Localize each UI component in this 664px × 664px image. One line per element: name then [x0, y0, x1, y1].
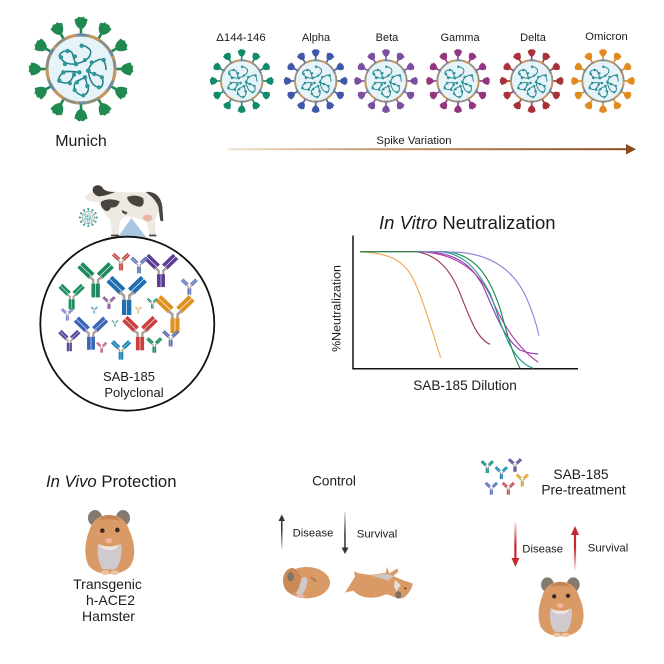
icon: lying hamster — [345, 567, 413, 599]
variant: Beta — [354, 32, 418, 113]
icon: Munich virus — [28, 16, 134, 122]
chart: neutralization curves — [330, 236, 578, 393]
variant: Gamma: Gamma — [440, 32, 480, 44]
variant: Gamma — [426, 32, 490, 113]
variant: Delta: Delta — [520, 32, 547, 44]
antibodies — [58, 253, 198, 360]
variant: delta 144-146 — [210, 32, 274, 113]
label: Disease red section: Disease — [522, 544, 563, 556]
label: Transgenic h-ACE2 Hamster: Hamster — [82, 608, 135, 624]
heading: In Vitro Neutralization: In Vitro Neutralization — [379, 212, 556, 233]
icon: protected hamster — [539, 577, 584, 637]
label: SAB-185 Pre-treatment: SAB-185 — [553, 467, 609, 482]
x axis label: SAB-185 Dilution — [413, 378, 517, 393]
label: Disease: Disease — [293, 528, 333, 540]
label: Spike Variation: Spike Variation — [376, 135, 452, 147]
heading: In Vivo Protection: In Vivo Protection — [46, 472, 176, 491]
icon: hamster — [85, 510, 134, 575]
panel: variants row — [210, 31, 635, 113]
label: SAB-185 Polyclonal: SAB-185 — [103, 369, 155, 384]
arrow: disease up — [278, 514, 285, 549]
icon: cow — [85, 185, 163, 236]
label: SAB-185 Pre-treatment: Pre-treatment — [541, 482, 626, 498]
label: Transgenic h-ACE2 Hamster: h-ACE2 — [86, 592, 135, 608]
arrow: spike variation — [228, 144, 636, 154]
variant: Beta: Beta — [376, 32, 399, 44]
variant: Delta — [500, 32, 564, 113]
variant: Alpha: Alpha — [302, 32, 331, 44]
icon: curled hamster — [283, 567, 330, 598]
curves — [360, 252, 539, 368]
arrow: disease down red — [512, 522, 519, 567]
label: SAB-185 Polyclonal: Polyclonal — [104, 385, 164, 400]
variant: delta 144-146: Δ144-146 — [216, 32, 266, 44]
icon: antibody group — [481, 458, 529, 495]
axes — [353, 236, 578, 369]
label: Survival: Survival — [357, 528, 397, 540]
panel: polyclonal antibody circle — [40, 237, 214, 411]
variant: Omicron — [571, 31, 635, 113]
variant: Alpha — [284, 32, 348, 113]
label: Control: Control — [312, 474, 356, 488]
arrow: survival up red — [571, 526, 579, 570]
label: Munich: Munich — [55, 133, 107, 150]
icon: small virus — [79, 208, 98, 227]
label: Transgenic h-ACE2 Hamster: Transgenic — [73, 576, 142, 592]
variant: Omicron: Omicron — [585, 31, 628, 43]
label: Survival red section: Survival — [588, 543, 628, 555]
icon: light cone — [118, 218, 146, 237]
y axis label: %Neutralization — [330, 265, 344, 352]
arrow: survival down — [342, 512, 348, 554]
